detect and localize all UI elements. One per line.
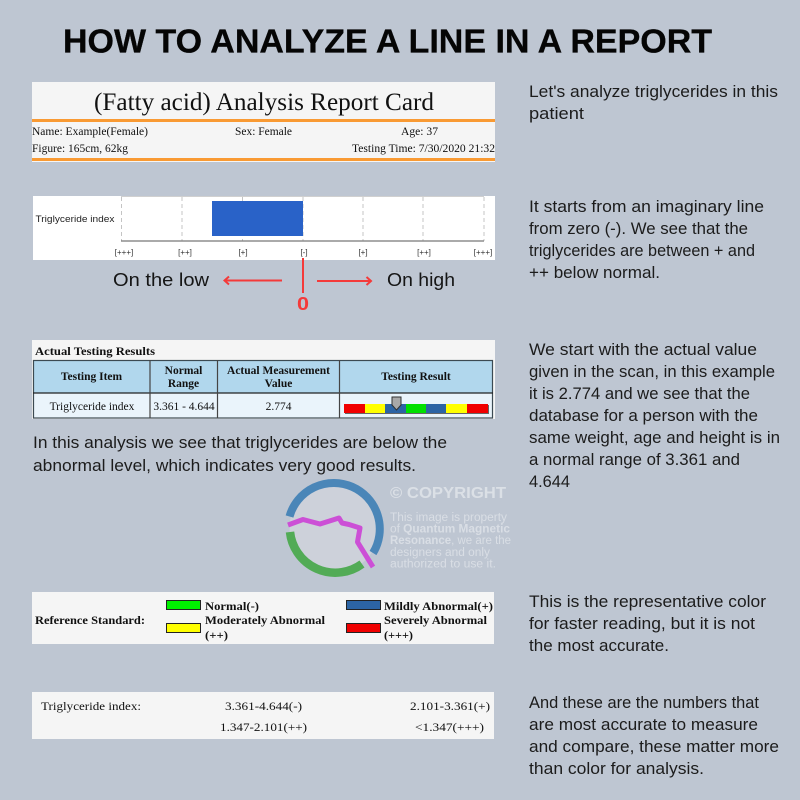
results heading: Actual Testing Results	[35, 344, 155, 358]
text: colour explanation: for faster reading, but it is not	[529, 615, 755, 633]
text: actual value explanation: it is 2.774 and we see that the	[529, 385, 750, 403]
text: actual value explanation: 4.644	[529, 473, 570, 491]
axis	[115, 241, 492, 257]
results table: Range	[168, 378, 199, 390]
chart label: Triglyceride index	[36, 214, 115, 225]
axis: [++]	[178, 248, 192, 257]
result slider	[344, 397, 489, 414]
patient details: Name: Example(Female)	[32, 126, 148, 138]
text: actual value explanation: a normal range of 3.361 and	[529, 451, 740, 469]
text: numbers explanation	[529, 694, 779, 778]
panel: triglyceride reference ranges: Triglyceride index:	[41, 701, 141, 713]
results table: 2.774	[266, 401, 292, 413]
text: actual value explanation: We start with the actual value	[529, 341, 757, 359]
arrow: right	[317, 277, 371, 285]
panel: triglyceride reference ranges	[32, 692, 494, 739]
text: colour explanation: the most accurate.	[529, 637, 669, 655]
panel: triglyceride reference ranges: 2.101-3.361(+)	[410, 701, 490, 713]
bar	[212, 201, 303, 236]
text: intro: Let's analyze triglycerides in this	[529, 83, 778, 101]
watermark: copyright text: authorized to use it.	[390, 558, 496, 570]
watermark: copyright text: Resonance, we are the	[390, 535, 511, 547]
watermark: copyright text	[390, 485, 511, 570]
text: analysis conclusion: In this analysis we see that triglycerides are below the	[33, 434, 447, 452]
results table: Actual Measurement	[227, 365, 330, 377]
text: numbers explanation: and compare, these matter more	[529, 738, 779, 756]
watermark: copyright text: © COPYRIGHT	[390, 485, 507, 502]
legend: moderately abnormal: (++)	[205, 630, 228, 642]
text: analysis conclusion: abnormal level, which indicates very good results.	[33, 457, 416, 475]
text: imaginary line explanation: ++ below normal.	[529, 264, 660, 282]
panel: actual testing results	[32, 340, 495, 419]
text: numbers explanation: than color for analysis.	[529, 760, 704, 778]
panel: triglyceride reference ranges: 3.361-4.644(-)	[225, 701, 302, 713]
text: actual value explanation: same weight, age and height is in	[529, 429, 780, 447]
panel: report card header	[32, 82, 495, 162]
text: intro	[529, 83, 778, 123]
axis: [+]	[358, 248, 368, 257]
title: HOW TO ANALYZE A LINE IN A REPORT	[63, 24, 713, 60]
text: actual value explanation	[529, 341, 780, 491]
patient details: Testing Time: 7/30/2020 21:32	[352, 143, 495, 155]
patient details: Age: 37	[401, 126, 438, 138]
panel: reference standard legend	[32, 592, 494, 644]
text: analysis conclusion	[33, 434, 447, 475]
arrow: zero marker line	[302, 258, 304, 293]
results table: Triglyceride index	[50, 401, 135, 413]
watermark: copyright text: designers and only	[390, 547, 490, 559]
axis: [++]	[417, 248, 431, 257]
patient details: Sex: Female	[235, 126, 292, 138]
text: actual value explanation: given in the scan, in this example	[529, 363, 775, 381]
panel: triglyceride reference ranges: 1.347-2.101(++)	[220, 722, 307, 734]
axis: [+++]	[115, 248, 133, 257]
report card title: (Fatty acid) Analysis Report Card	[94, 87, 434, 116]
legend title: Reference Standard:	[35, 615, 145, 627]
results table: Normal	[165, 365, 202, 377]
legend: severely abnormal: (+++)	[384, 630, 413, 642]
watermark: copyright text: of Quantum Magnetic	[390, 524, 511, 536]
text: imaginary line explanation: from zero (-). We see that the	[529, 220, 748, 238]
text: numbers explanation: And these are the numbers that	[529, 694, 759, 712]
label: on high: On high	[387, 269, 455, 290]
legend: normal: Normal(-)	[205, 601, 259, 613]
legend: mildly abnormal: Mildly Abnormal(+)	[384, 601, 493, 613]
legend: mildly abnormal	[346, 600, 493, 613]
axis: [+]	[238, 248, 248, 257]
label: zero: 0	[297, 294, 309, 314]
text: imaginary line explanation: It starts from an imaginary line	[529, 198, 764, 216]
text: actual value explanation: database for a person with the	[529, 407, 758, 425]
results table: 3.361 - 4.644	[153, 401, 215, 413]
panel: triglyceride index chart	[33, 196, 495, 260]
text: imaginary line explanation: triglycerides are between + and	[529, 242, 755, 260]
results table: Value	[265, 378, 292, 390]
text: colour explanation	[529, 593, 767, 655]
legend: normal	[166, 600, 259, 613]
axis: [+++]	[474, 248, 492, 257]
axis: [-]	[300, 248, 308, 257]
legend: severely abnormal: Severely Abnormal	[384, 615, 487, 627]
legend: moderately abnormal	[166, 615, 325, 642]
results table	[33, 360, 493, 418]
text: colour explanation: This is the representative color	[529, 593, 767, 611]
legend: moderately abnormal: Moderately Abnormal	[205, 615, 325, 627]
legend: severely abnormal	[346, 615, 487, 642]
arrow: left	[224, 276, 282, 284]
patient details	[32, 126, 495, 155]
results table: Testing Item	[61, 371, 123, 383]
watermark: copyright logo	[288, 482, 380, 573]
panel: triglyceride reference ranges: <1.347(+++)	[415, 722, 484, 734]
results table: Testing Result	[381, 371, 451, 383]
text: numbers explanation: are most accurate to measure	[529, 716, 758, 734]
text: imaginary line explanation	[529, 198, 764, 282]
watermark: copyright text: This image is property	[390, 512, 507, 524]
patient details: Figure: 165cm, 62kg	[32, 143, 128, 155]
label: on the low: On the low	[113, 269, 210, 290]
text: intro: patient	[529, 105, 584, 123]
